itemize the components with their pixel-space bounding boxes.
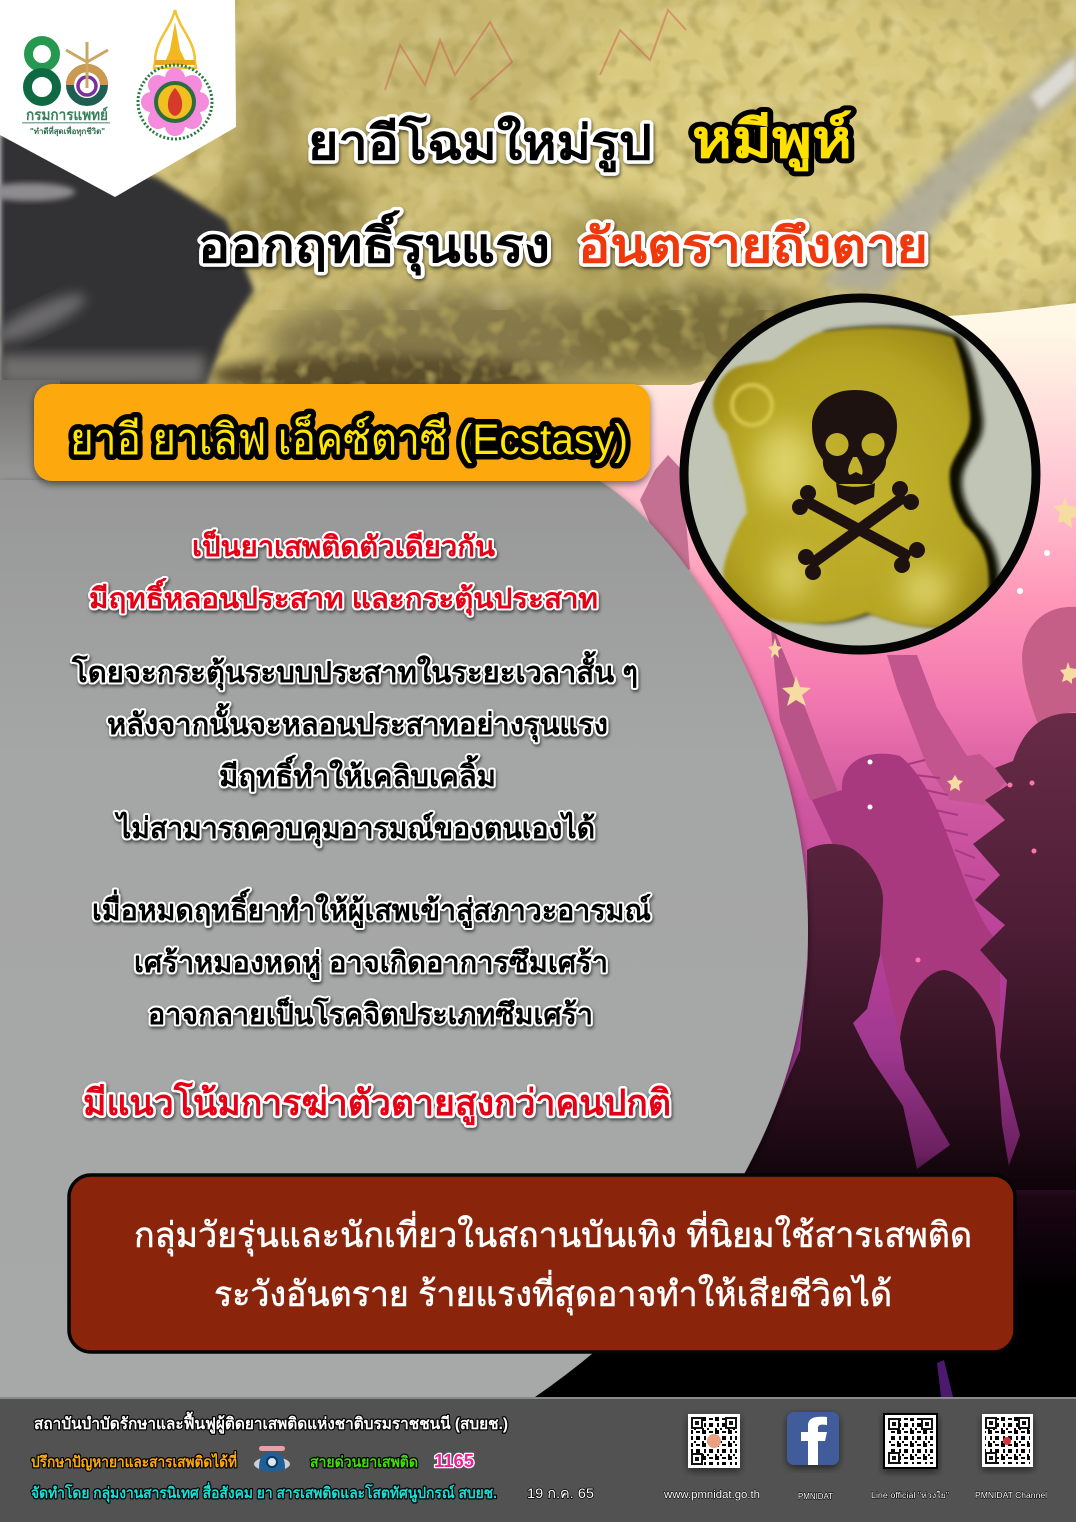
- right front dancer: [973, 713, 1076, 1190]
- warning box: [69, 1175, 1015, 1352]
- red intro text: มีฤทธิ์หลอนประสาท และกระตุ้นประสาท: [89, 578, 598, 616]
- logo: Department of Medical Services 80 years: "ทำดีที่สุดเพื่อทุกชีวิต": [30, 125, 105, 137]
- hotline label: สายด่วนยาเสพติด: [310, 1453, 418, 1471]
- background dancer: [812, 754, 1000, 1090]
- body paragraph 2: เศร้าหมองหดหู่ อาจเกิดอาการซึมเศร้า: [134, 947, 608, 980]
- body paragraph 2: [92, 888, 651, 1031]
- footer bar: [0, 1397, 1076, 1522]
- title: [198, 110, 928, 276]
- title: อันตรายถึงตาย: [578, 220, 928, 273]
- logo: Department of Medical Services 80 years: [22, 40, 110, 137]
- QR captions: [663, 1489, 1047, 1501]
- icon: telephone: [254, 1446, 290, 1472]
- title: หมีพูห์: [692, 110, 852, 172]
- QR code: channel: [982, 1414, 1033, 1467]
- title: ยาอีโฉมใหม่รูป: [308, 114, 652, 173]
- icon: facebook: [787, 1412, 839, 1465]
- logo: Department of Medical Services 80 years: กรมการแพทย์: [26, 106, 108, 124]
- orange heading bar: [34, 384, 650, 481]
- middle dancer: [900, 970, 1012, 1185]
- QR captions: PMNIDAT: [798, 1492, 833, 1501]
- dark satin cloth: [0, 132, 254, 395]
- body paragraph 1: ไม่สามารถควบคุมอารมณ์ของตนเองได้: [114, 811, 595, 846]
- pink party background: [0, 300, 1076, 1400]
- red warning line: มีแนวโน้มการฆ่าตัวตายสูงกว่าคนปกติ: [83, 1081, 671, 1126]
- hand left of pill circle: [640, 455, 690, 570]
- body paragraph 1: มีฤทธิ์ทำให้เคลิบเคลิ้ม: [219, 754, 496, 793]
- producer credit: จัดทำโดย กลุ่มงานสารนิเทศ สื่อสังคม ยา สารเสพติดและโสตทัศนูปกรณ์ สบยช.: [31, 1482, 497, 1503]
- pill circle with skull: [684, 298, 1036, 650]
- crowd silhouettes: [640, 455, 1076, 1397]
- QR captions: Line official "ห่วงใย": [871, 1491, 949, 1500]
- hotline number: 1165: [434, 1451, 474, 1471]
- bear pill shadow: [800, 322, 1003, 630]
- QR code: line official: [884, 1414, 937, 1468]
- body paragraph 1: หลังจากนั้นจะหลอนประสาทอย่างรุนแรง: [107, 702, 608, 742]
- body paragraph 2: อาจกลายเป็นโรคจิตประเภทซึมเศร้า: [148, 996, 593, 1031]
- QR captions: PMNIDAT Channel: [975, 1491, 1047, 1500]
- left front dancer: [740, 844, 925, 1185]
- olive bag folds: [234, 40, 302, 180]
- consult text: ปรึกษาปัญหายาและสารเสพติดได้ที่: [31, 1451, 237, 1471]
- institute name: สถาบันบำบัดรักษาและฟื้นฟูผู้ติดยาเสพติดแห่งชาติบรมราชชนนี (สบยช.): [34, 1411, 508, 1435]
- stars and sparkles: [768, 497, 1076, 962]
- photo: bags of bear pills: [0, 0, 1076, 395]
- upper right background dancer: [1022, 607, 1076, 722]
- gold pill texture: [150, 0, 1076, 385]
- body paragraph 2: เมื่อหมดฤทธิ์ยาทำให้ผู้เสพเข้าสู่สภาวะอารมณ์: [92, 888, 651, 928]
- white logo banner: [0, 0, 236, 197]
- QR code: website: [688, 1414, 740, 1468]
- logo: institute lotus and spire: [138, 10, 212, 139]
- body paragraph 1: โดยจะกระตุ้นระบบประสาทในระยะเวลาสั้น ๆ: [71, 650, 638, 690]
- title: ออกฤทธิ์รุนแรง: [198, 210, 550, 276]
- gray text panel: [0, 480, 808, 1397]
- purple shard under box: [937, 1360, 953, 1397]
- warning box: กลุ่มวัยรุ่นและนักเที่ยวในสถานบันเทิง ที่นิยมใช้สารเสพติด: [134, 1211, 972, 1256]
- gray strip left of heading: [0, 380, 60, 482]
- red marker scribbles on bag: [385, 10, 686, 100]
- background dancer hair: [905, 760, 985, 880]
- QR captions: www.pmnidat.go.th: [663, 1489, 760, 1501]
- red intro text: เป็นยาเสพติดตัวเดียวกัน: [192, 529, 495, 562]
- plastic bag streak: [820, 48, 1076, 295]
- date: 19 ก.ค. 65: [527, 1485, 594, 1501]
- bear pill: [713, 327, 989, 627]
- heading: ecstasy: ยาอี ยาเลิฟ เอ็คซ์ตาซี (Ecstasy): [70, 414, 628, 464]
- red intro text: [89, 529, 598, 616]
- icon: skull and crossbones: [792, 390, 925, 580]
- background arm along panel edge: [770, 620, 842, 802]
- background dancer raised arm: [887, 655, 1007, 805]
- bear ear ring: [732, 385, 772, 425]
- body paragraph 1: [71, 650, 638, 846]
- warning box: ระวังอันตราย ร้ายแรงที่สุดอาจทำให้เสียชีวิตได้: [214, 1270, 892, 1315]
